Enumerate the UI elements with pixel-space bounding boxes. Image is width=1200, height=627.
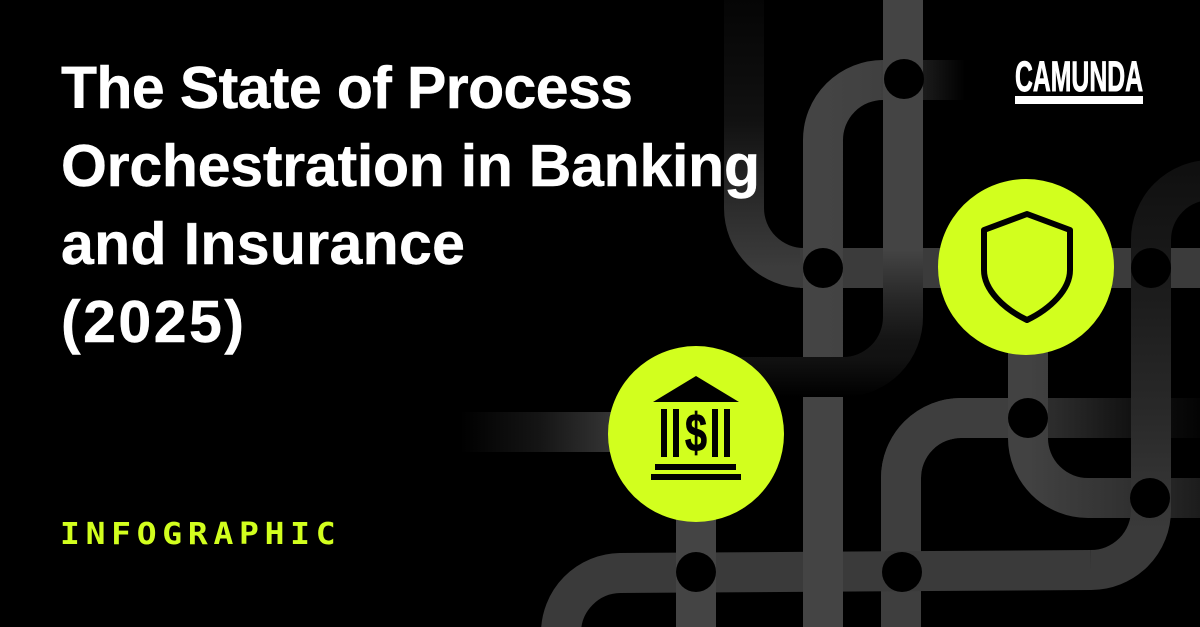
track: lower curve left vertical	[901, 418, 1010, 627]
title: The State of Process	[61, 55, 633, 121]
node	[884, 59, 924, 99]
icon: bank badge	[608, 346, 784, 522]
node	[1131, 248, 1171, 288]
icon: bank badge: $	[685, 403, 707, 463]
track: bottom curve	[561, 570, 1091, 627]
track: vertical centre lower	[803, 397, 843, 627]
node	[676, 552, 716, 592]
title: Orchestration in Banking	[61, 133, 760, 199]
title	[61, 55, 760, 355]
title: (2025)	[61, 289, 244, 355]
node	[882, 552, 922, 592]
track: centre line fading into dark curve	[700, 0, 903, 377]
track: lower horizontal fading right	[901, 418, 1200, 627]
process track network	[460, 0, 1200, 627]
track: upper-left curve into horizontal line	[744, 0, 1200, 268]
track: right dark line	[1091, 180, 1200, 570]
node	[1008, 398, 1048, 438]
icon: shield badge	[938, 179, 1114, 355]
track: curve under shield	[1028, 340, 1200, 498]
track junction nodes	[676, 59, 1171, 592]
track: upper curve fading right	[823, 80, 965, 397]
track: left fading stub	[460, 412, 620, 452]
track: horizontal line at shield level	[800, 248, 1200, 288]
title: and Insurance	[61, 211, 465, 277]
node	[1130, 478, 1170, 518]
track: vertical below bank	[676, 510, 716, 627]
node	[803, 248, 843, 288]
label: infographic: INFOGRAPHIC	[60, 517, 341, 552]
logo: Camunda	[1015, 53, 1143, 104]
